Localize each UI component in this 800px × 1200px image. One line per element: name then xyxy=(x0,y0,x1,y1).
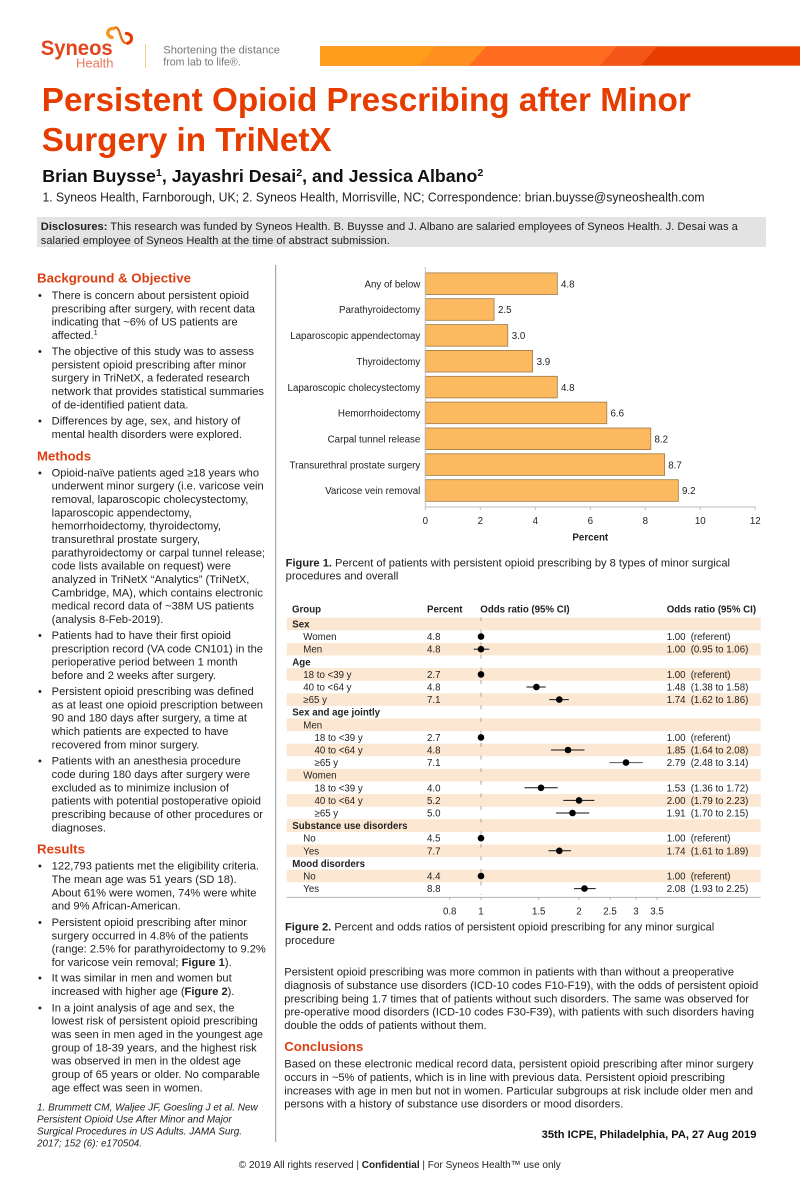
header gradient band xyxy=(320,46,800,66)
group labels: Yes xyxy=(303,884,319,895)
odds ratio column: (referent) xyxy=(691,670,731,681)
heading: conclusions: Conclusions xyxy=(284,1039,363,1054)
percent column: 4.8 xyxy=(427,746,440,756)
text block: results bullets: for varicose vein removal; Figure 1). xyxy=(52,957,232,969)
odds ratio column: (referent) xyxy=(691,872,731,882)
group labels: ≥65 y xyxy=(314,758,338,769)
value labels: 4.8 xyxy=(561,383,575,394)
text block: background bullets: network that provides statistical summaries xyxy=(52,386,265,398)
category labels: Hemorrhoidectomy xyxy=(338,409,420,420)
text block: methods bullets: prescription record (VA code CN101) in the xyxy=(52,643,263,655)
text block: results bullets: It was similar in men and women but xyxy=(52,973,232,985)
text block: results bullets: • xyxy=(38,861,42,873)
value labels: 2.5 xyxy=(498,305,512,316)
odds ratio column: 1.91 xyxy=(667,808,686,820)
table header xyxy=(292,604,756,615)
text block: methods bullets: Cambridge, MA), which contains electronic xyxy=(52,587,263,599)
group labels: Men xyxy=(303,720,322,731)
tagline: Shortening the distance xyxy=(163,44,280,56)
figure 1 caption xyxy=(286,558,730,583)
text block: reference: Persistent Opioid Use After Minor and Major xyxy=(37,1114,232,1125)
value labels: 8.2 xyxy=(654,434,668,446)
log axis: 2.5 xyxy=(603,906,617,917)
text block: background bullets: 1 xyxy=(94,330,98,337)
panel: background and objective xyxy=(37,271,265,441)
log axis: 1.5 xyxy=(532,906,545,917)
text block: background bullets: • xyxy=(38,290,42,302)
category labels: Laparoscopic appendectomay xyxy=(290,331,420,342)
odds ratio column: 1.00 xyxy=(667,632,686,643)
log axis: 2 xyxy=(576,906,582,917)
category labels: Transurethral prostate surgery xyxy=(290,460,420,471)
log axis: 0.8 xyxy=(443,906,456,917)
value labels: 8.7 xyxy=(668,460,682,471)
text block: background bullets: affected. xyxy=(52,330,94,342)
group labels: 40 to <64 y xyxy=(303,682,352,694)
group labels: Women xyxy=(303,632,337,643)
odds ratio column: 1.00 xyxy=(667,834,686,845)
axis tick labels: 6 xyxy=(588,516,593,527)
figure 2 caption: Figure 2. Percent and odds ratios of persistent opioid prescribing for any minor surgical xyxy=(285,922,714,934)
value labels: 3.9 xyxy=(537,357,550,368)
category labels: Carpal tunnel release xyxy=(328,434,420,446)
axis tick labels: 2 xyxy=(478,516,483,527)
table header: Odds ratio (95% CI) xyxy=(667,604,756,615)
text block: methods bullets: Opioid-naïve patients aged ≥18 years who xyxy=(52,467,259,479)
text block: methods bullets: hemorrhoidectomy, thyroidectomy, xyxy=(52,521,221,533)
panel: conclusions xyxy=(284,1039,754,1111)
axis tick labels: 0 xyxy=(423,516,429,527)
axes xyxy=(425,267,755,510)
table header: Group xyxy=(292,604,321,615)
percent column: 2.7 xyxy=(427,733,440,744)
group labels: Mood disorders xyxy=(292,859,365,870)
text block: methods bullets: Persistent opioid prescribing was defined xyxy=(52,686,254,698)
text block: results bullets xyxy=(38,861,266,1094)
odds ratio column: (1.93 to 2.25) xyxy=(691,884,748,895)
text block: methods bullets: (analysis 8-Feb-2019). xyxy=(52,614,163,626)
text block: results bullets: • xyxy=(38,973,42,985)
group labels: 18 to <39 y xyxy=(314,733,363,744)
point estimates xyxy=(478,633,629,892)
table header: Percent xyxy=(427,604,463,615)
percent column: 4.5 xyxy=(427,834,440,845)
authors: 1 xyxy=(156,167,162,179)
group labels: Substance use disorders xyxy=(292,821,408,832)
title xyxy=(42,82,691,159)
percent column: 5.0 xyxy=(427,808,441,820)
odds ratio column: (1.38 to 1.58) xyxy=(691,682,748,694)
text block: background bullets: There is concern about persistent opioid xyxy=(52,290,249,302)
text block: background bullets: mental health disorders were explored. xyxy=(52,429,242,441)
text block: methods bullets: medical record data of ~38M US patients xyxy=(52,601,254,613)
log axis: 1 xyxy=(478,906,484,917)
group labels: Age xyxy=(292,657,311,668)
authors: 2 xyxy=(477,167,483,179)
text block: methods bullets: code during 180 days after surgery were xyxy=(52,769,250,781)
odds ratio column: (1.36 to 1.72) xyxy=(691,783,748,794)
axis tick labels xyxy=(423,516,761,527)
group labels: 18 to <39 y xyxy=(314,783,363,794)
odds ratio column: 1.00 xyxy=(667,645,686,656)
conference note: 35th ICPE, Philadelphia, PA, 27 Aug 2019 xyxy=(542,1129,756,1141)
text block: background bullets: surgery in TriNetX, a federated research xyxy=(52,373,250,385)
text block: results bullets: increased with higher age (Figure 2). xyxy=(52,986,234,998)
text block: methods bullets: code lists available on request) were xyxy=(52,561,231,573)
text block: methods bullets xyxy=(38,467,265,834)
text block: results bullets: lowest risk of persistent opioid prescribing xyxy=(52,1016,258,1028)
category labels: Parathyroidectomy xyxy=(339,305,420,316)
heading: methods: Methods xyxy=(37,448,91,463)
odds ratio column: 1.53 xyxy=(667,783,686,794)
value labels xyxy=(498,279,696,497)
text block: methods bullets: • xyxy=(38,630,42,642)
text block: methods bullets: which patients are expected to have xyxy=(51,726,228,738)
text block: results bullets: group of 18-39 years, and the highest risk xyxy=(52,1042,257,1054)
authors: , Jayashri Desai xyxy=(162,166,296,186)
bars xyxy=(425,273,678,501)
text block: background bullets: persistent opioid prescribing after minor xyxy=(52,359,247,371)
odds ratio column: 1.48 xyxy=(667,682,686,694)
odds ratio column: (1.64 to 2.08) xyxy=(691,746,748,756)
text block: results bullets: (range: 2.5% for parathyroidectomy to 9.2% xyxy=(52,944,266,956)
text block: methods bullets: • xyxy=(38,686,42,698)
odds ratio column: (1.79 to 2.23) xyxy=(691,796,748,807)
text block: methods bullets: as at least one opioid prescription between xyxy=(52,699,263,711)
category labels: Varicose vein removal xyxy=(325,486,420,497)
group labels: Yes xyxy=(303,846,319,857)
percent column: 4.8 xyxy=(427,632,440,643)
text block: results bullets: group of 65 years or older. No comparable xyxy=(52,1069,260,1081)
text block: methods bullets: before and 2 weeks after surgery. xyxy=(52,670,216,682)
text block: reference xyxy=(36,1102,259,1149)
text block: methods bullets: analyzed in TriNetX “Analytics” (TriNetX, xyxy=(52,574,249,586)
heading: background and objective: Background & Objective xyxy=(37,271,191,286)
heading: results: Results xyxy=(37,842,85,857)
odds ratio column: (1.62 to 1.86) xyxy=(691,695,748,706)
text block: conclusions: persons with a history of substance use disorders or mood disorders. xyxy=(284,1099,623,1111)
odds ratio column: (referent) xyxy=(691,632,731,643)
text block: methods bullets: Patients with an anesthesia procedure xyxy=(52,756,241,768)
logo wordmark: Syneos xyxy=(41,37,113,60)
percent column: 4.0 xyxy=(427,783,441,794)
affiliations: 1. Syneos Health, Farnborough, UK; 2. Syneos Health, Morrisville, NC; Correspondence: brian.buysse@syneoshealth.com xyxy=(42,190,704,205)
group labels: 40 to <64 y xyxy=(314,796,363,807)
group labels: 18 to <39 y xyxy=(303,670,352,681)
odds ratio column: (2.48 to 3.14) xyxy=(691,758,748,769)
figure 1 caption: Figure 1. Percent of patients with persistent opioid prescribing by 8 types of minor surgical xyxy=(286,558,730,570)
text block: mental health results: prescribing being 1.7 times that of patients without such disorders. The same was observed for xyxy=(284,993,749,1005)
group labels: ≥65 y xyxy=(303,695,327,706)
odds ratio column: (referent) xyxy=(691,834,731,845)
group labels: 40 to <64 y xyxy=(314,746,363,756)
text block: results bullets: Persistent opioid prescribing after minor xyxy=(52,917,247,929)
text block: background bullets xyxy=(38,290,265,441)
text block: reference: Surgical Procedures in US Adults. JAMA Surg. xyxy=(37,1126,242,1137)
percent column: 2.7 xyxy=(427,670,440,681)
percent column: 7.1 xyxy=(427,695,440,706)
odds ratio column: 2.79 xyxy=(667,758,686,769)
text block: results bullets: • xyxy=(38,917,42,929)
value labels: 3.0 xyxy=(512,331,526,342)
category labels: Laparoscopic cholecystectomy xyxy=(288,383,420,394)
logo subtitle: Health xyxy=(76,56,114,71)
odds ratio column xyxy=(667,632,748,895)
text block: results bullets: and 9% African-American. xyxy=(52,901,181,913)
footer: © 2019 All rights reserved | Confidential | For Syneos Health™ use only xyxy=(239,1159,562,1171)
authors: 2 xyxy=(296,167,302,179)
text block: results bullets: The mean age was 51 years (SD 18). xyxy=(52,874,237,886)
axis tick labels: 4 xyxy=(533,516,539,527)
text block: methods bullets: • xyxy=(38,756,42,768)
axis title: Percent xyxy=(572,533,609,544)
value labels: 6.6 xyxy=(610,409,624,420)
text block: conclusions: Based on these electronic medical record data, persistent opioid prescribing after minor surgery xyxy=(284,1059,754,1071)
disclosures box: Disclosures: This research was funded by Syneos Health. B. Buysse and J. Albano are salaried employees of Syneos Health. J. Desai was a xyxy=(41,221,739,233)
text block: conclusions: increases with age in men but not in women. Particular subgroups at risk include older men and xyxy=(284,1085,753,1097)
percent column: 7.1 xyxy=(427,758,440,769)
text block: methods bullets: 90 and 180 days after surgery, a time at xyxy=(52,713,247,725)
text block: methods bullets: transurethral prostate surgery, xyxy=(52,534,200,546)
text block: methods bullets: recovered from minor surgery. xyxy=(52,739,199,751)
text block: methods bullets: diagnoses. xyxy=(52,822,106,834)
group labels: Women xyxy=(303,771,337,782)
text block: background bullets: • xyxy=(38,346,42,358)
percent column: 4.8 xyxy=(427,645,440,656)
text block: mental health results: pre-operative mood disorders (ICD-10 codes F30-F39), with patients with such disorders having xyxy=(284,1007,754,1019)
axis tick labels: 10 xyxy=(695,516,706,527)
panel: results xyxy=(36,842,266,1149)
percent column: 7.7 xyxy=(427,846,440,857)
confidence interval lines xyxy=(474,649,643,889)
odds ratio column: 1.74 xyxy=(667,846,686,857)
odds ratio column: 1.00 xyxy=(667,872,686,882)
axis tick labels: 12 xyxy=(750,516,761,527)
authors: Brian Buysse xyxy=(42,166,154,186)
text block: methods bullets: perioperative period between 1 month xyxy=(52,657,238,669)
odds ratio column: (1.70 to 2.15) xyxy=(691,808,748,820)
text block: mental health results: Persistent opioid prescribing was more common in patients with than without a preoperative xyxy=(284,967,734,979)
authors: , and Jessica Albano xyxy=(302,166,477,186)
group labels: Sex xyxy=(292,620,310,630)
log axis: 3.5 xyxy=(650,906,664,917)
group labels: Sex and age jointly xyxy=(292,708,381,719)
text block: results bullets: surgery occurred in 4.8% of the patients xyxy=(52,930,249,942)
text block: conclusions: occurs in ~5% of patients, which is in line with previous data. Persistent opioid prescribing xyxy=(284,1072,725,1084)
axis tick labels: 8 xyxy=(643,516,648,527)
text block: results bullets: 122,793 patients met the eligibility criteria. xyxy=(52,861,259,873)
odds ratio column: 1.74 xyxy=(667,695,686,706)
text block: methods bullets: parathyroidectomy or carpal tunnel release; xyxy=(52,548,265,560)
log axis xyxy=(287,897,761,917)
odds ratio column: (1.61 to 1.89) xyxy=(691,846,748,857)
odds ratio column: 2.08 xyxy=(667,884,686,895)
text block: methods bullets: excluded as to minimize inclusion of xyxy=(52,782,230,794)
text block: methods bullets: underwent minor surgery (i.e. varicose vein xyxy=(52,481,264,493)
group labels: Men xyxy=(303,645,322,656)
text block: methods bullets: patients with potential postoperative opioid xyxy=(52,796,261,808)
text block: background bullets: of de-identified patient data. xyxy=(52,399,188,411)
figure 2 caption: procedure xyxy=(285,935,335,947)
text block: background bullets: • xyxy=(38,416,42,428)
odds ratio column: (0.95 to 1.06) xyxy=(691,645,748,656)
category labels xyxy=(288,279,421,497)
text block: results bullets: About 61% were women, 74% were white xyxy=(52,887,256,899)
text block: mental health results: diagnosis of substance use disorders (ICD-10 codes F10-F19), with the odds of persistent opioid xyxy=(284,980,758,992)
text block: methods bullets: prescribing because of other procedures or xyxy=(52,809,263,821)
category labels: Thyroidectomy xyxy=(356,357,420,368)
odds ratio column: 2.00 xyxy=(667,796,686,807)
percent column: 8.8 xyxy=(427,884,440,895)
text block: methods bullets: • xyxy=(38,467,42,479)
text block: results bullets: was seen in men aged in the youngest age xyxy=(51,1029,263,1041)
title: Persistent Opioid Prescribing after Minor xyxy=(42,82,691,119)
disclosures box: salaried employee of Syneos Health at the time of abstract submission. xyxy=(41,235,390,247)
text block: results bullets: was observed in men in the oldest age xyxy=(51,1056,241,1068)
table header: Odds ratio (95% CI) xyxy=(480,604,570,615)
percent column: 5.2 xyxy=(427,796,440,807)
group labels: No xyxy=(303,834,316,845)
header: logo and tagline xyxy=(41,28,280,71)
text block: methods bullets: laparoscopic appendectomy, xyxy=(52,507,192,519)
title: Surgery in TriNetX xyxy=(42,122,332,159)
text block: results bullets: age effect was seen in women. xyxy=(52,1082,203,1094)
category labels: Any of below xyxy=(364,279,421,290)
odds ratio column: (referent) xyxy=(691,733,731,744)
text block: methods bullets: Patients had to have their first opioid xyxy=(52,630,231,642)
percent column: 4.8 xyxy=(427,682,440,694)
odds ratio column: 1.00 xyxy=(667,670,686,681)
text block: mental health results: double the odds of patients without them. xyxy=(284,1020,487,1032)
icon: Syneos logo swirl xyxy=(108,28,132,43)
percent column: 4.4 xyxy=(427,872,441,882)
group labels xyxy=(292,620,408,895)
log axis: 3 xyxy=(633,906,639,917)
text block: results bullets: • xyxy=(38,1002,42,1014)
bar chart: figure 1 xyxy=(288,267,761,544)
text block: reference: 1. Brummett CM, Waljee JF, Goesling J et al. New xyxy=(37,1102,259,1113)
text block: background bullets: indicating that ~6% of US patients are xyxy=(52,317,238,329)
figure 2 caption xyxy=(285,922,714,947)
text block: background bullets: The objective of this study was to assess xyxy=(52,346,254,358)
text block: conclusions xyxy=(284,1059,754,1111)
row stripes xyxy=(287,618,761,882)
group labels: ≥65 y xyxy=(314,808,338,820)
forest plot: figure 2 xyxy=(287,604,761,917)
text block: methods bullets: removal, laparoscopic cholecystectomy, xyxy=(52,494,248,506)
tagline: from lab to life®. xyxy=(163,57,241,69)
text block: background bullets: Differences by age, sex, and history of xyxy=(52,416,241,428)
group labels: No xyxy=(303,872,316,882)
percent column xyxy=(427,632,441,895)
panel: methods xyxy=(37,448,265,834)
value labels: 9.2 xyxy=(682,486,696,497)
disclosures box xyxy=(37,217,766,247)
text block: background bullets: prescribing after surgery, with recent data xyxy=(52,303,256,315)
text block: mental health results xyxy=(284,967,758,1032)
text block: results bullets: In a joint analysis of age and sex, the xyxy=(52,1002,234,1014)
value labels: 4.8 xyxy=(561,279,575,290)
odds ratio column: 1.00 xyxy=(667,733,686,744)
odds ratio column: 1.85 xyxy=(667,746,686,756)
figure 1 caption: procedures and overall xyxy=(286,571,398,583)
text block: reference: 2017; 152 (6): e170504. xyxy=(36,1138,142,1149)
